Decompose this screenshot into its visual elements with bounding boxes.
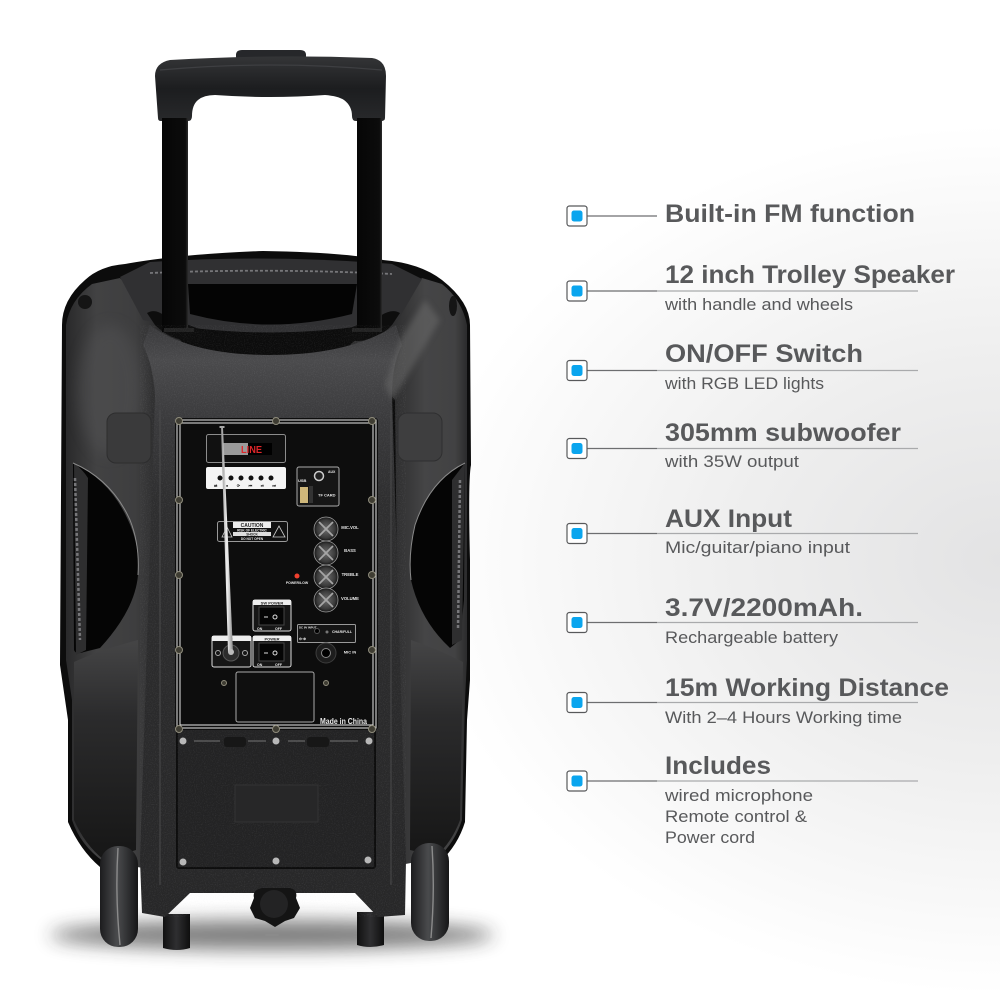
feature: Includes: Includes	[665, 752, 771, 780]
feature: Built-in FM function: Built-in FM function	[665, 200, 915, 228]
control panel	[175, 418, 378, 732]
rotary knobs: TREBLE	[342, 572, 359, 577]
feature: 15m Working Distance: 15m Working Distance	[665, 674, 949, 702]
feature: AUX Input: Mic/guitar/piano input	[665, 539, 850, 557]
panel plate	[175, 418, 378, 730]
MIC IN jack	[316, 643, 356, 663]
trolley handle	[155, 50, 386, 121]
telescopic antenna	[220, 427, 234, 655]
FM display	[206, 434, 286, 462]
power LED	[286, 574, 309, 585]
caution label: RISK OF ELECTRIC	[237, 528, 268, 532]
lower frame knob	[250, 888, 300, 927]
left shoulder highlight	[78, 325, 142, 455]
shoulder indents	[107, 413, 442, 463]
trolley poles	[162, 118, 382, 332]
centre column	[140, 325, 406, 917]
SW power switch: OFF	[275, 627, 283, 631]
wheels	[100, 843, 449, 947]
DC input box: ⊖·⊕	[299, 637, 307, 641]
antenna socket	[212, 636, 251, 667]
USB AUX box: AUX	[328, 470, 336, 474]
USB AUX box: USB	[298, 478, 307, 483]
media buttons	[206, 467, 286, 489]
feature: 3.7V/2200mAh.	[567, 594, 918, 647]
FM display: LINE	[241, 445, 262, 456]
rotary knobs: BASS	[344, 548, 356, 553]
feature: Includes: wired microphone	[664, 787, 813, 805]
feature: Built-in FM function	[567, 200, 915, 228]
DC input box	[298, 624, 356, 642]
feature: Includes	[567, 752, 918, 847]
feature: 15m Working Distance: With 2–4 Hours Working time	[665, 709, 902, 727]
feature: ON/OFF Switch	[567, 340, 918, 393]
caution label	[218, 522, 288, 542]
rotary knobs: VOLUME	[341, 596, 359, 601]
feature: 12 inch Trolley Speaker	[567, 261, 955, 314]
pole slots	[147, 118, 400, 341]
power LED: POWER/LOW	[286, 581, 309, 585]
battery cover	[177, 728, 375, 868]
feature: 15m Working Distance	[567, 674, 949, 727]
DC input box: CHAR/FULL	[332, 630, 353, 634]
left handle cut-out	[73, 463, 138, 655]
feature: ON/OFF Switch: with RGB LED lights	[664, 375, 824, 393]
feature: 12 inch Trolley Speaker: 12 inch Trolley Speaker	[665, 261, 955, 289]
blank label area	[236, 672, 314, 722]
SW power switch: ON	[257, 627, 263, 631]
feature: AUX Input	[567, 505, 918, 557]
main power switch: ON	[257, 663, 263, 667]
MIC IN jack: MIC IN	[344, 650, 356, 654]
feature: Includes: Power cord	[665, 829, 755, 847]
right handle cut-out	[410, 463, 465, 648]
made in China: Made in China	[320, 716, 367, 726]
feature: Includes: Remote control &	[665, 808, 807, 826]
top recess	[78, 258, 457, 332]
caution label: SHOCK	[246, 532, 258, 536]
feature: ON/OFF Switch: ON/OFF Switch	[665, 340, 863, 368]
main power switch: OFF	[275, 663, 283, 667]
panel screws	[176, 418, 376, 732]
speaker body shell	[60, 251, 471, 867]
right side panel	[350, 278, 467, 865]
SW power switch	[253, 600, 291, 631]
feature: 12 inch Trolley Speaker: with handle and wheels	[664, 296, 853, 314]
feature: 3.7V/2200mAh.: 3.7V/2200mAh.	[665, 594, 863, 622]
rotary knobs: MIC.VOL	[341, 525, 359, 530]
media buttons: ⇄ ● ⟳ ⏮ ⏯ ⏭	[214, 482, 276, 489]
feature: AUX Input: AUX Input	[665, 505, 793, 533]
rotary knobs	[314, 517, 359, 612]
lower side panels	[74, 640, 463, 860]
speaker product	[60, 50, 471, 950]
USB AUX box	[297, 467, 339, 506]
DC input box: DC 9V INPUT	[299, 626, 317, 630]
ground shadow	[50, 920, 494, 950]
right shoulder highlight	[385, 300, 440, 400]
feet	[163, 912, 384, 950]
feature: 305mm subwoofer: with 35W output	[664, 453, 799, 471]
SW power switch: SW POWER	[261, 600, 283, 605]
caution label: DO NOT OPEN	[241, 537, 264, 541]
caution label: CAUTION	[241, 523, 264, 529]
main power switch	[253, 636, 291, 667]
feature: 305mm subwoofer	[567, 419, 918, 471]
feature: 3.7V/2200mAh.: Rechargeable battery	[665, 629, 839, 647]
main power switch: POWER	[264, 636, 280, 641]
USB AUX box: TF CARD	[318, 492, 336, 498]
antenna socket: F	[230, 636, 233, 641]
feature: 305mm subwoofer: 305mm subwoofer	[665, 419, 901, 447]
knob cap	[260, 890, 288, 918]
left side panel	[66, 278, 185, 870]
